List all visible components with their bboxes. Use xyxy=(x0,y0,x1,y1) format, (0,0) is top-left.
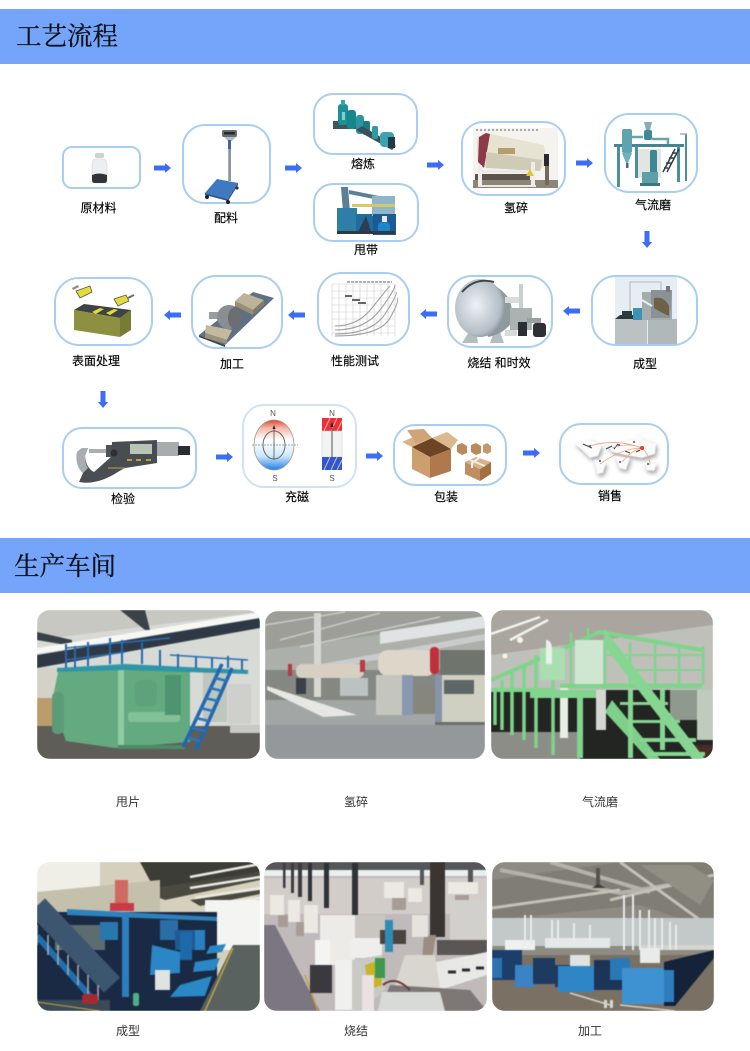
label: hydrogen decrepitation: 氢碎 xyxy=(504,201,528,215)
heading: process flow: 工艺流程 xyxy=(16,22,118,51)
label: magnetizing: 充磁 xyxy=(285,490,309,504)
arrow left xyxy=(420,309,437,319)
photo: hydrogen workshop xyxy=(265,611,485,759)
label: batching: 配料 xyxy=(214,211,238,225)
icon: machining fixture xyxy=(199,292,274,347)
label: jet mill: 气流磨 xyxy=(635,198,671,212)
panel: performance test xyxy=(317,272,410,346)
panel: strip casting xyxy=(313,183,419,242)
heading: production workshop xyxy=(0,538,750,593)
arrow left xyxy=(288,310,305,320)
arrow xyxy=(154,163,171,173)
panel: raw material xyxy=(62,146,141,189)
label: sintering: 烧结 xyxy=(344,1024,368,1038)
arrow down xyxy=(642,231,652,248)
icon: magnetic field diagrams: S xyxy=(272,474,278,483)
label: surface treatment: 表面处理 xyxy=(72,354,120,368)
label: inspection: 检验 xyxy=(111,492,135,506)
label: sintering and aging: 烧结 和时效 xyxy=(467,356,531,370)
label: raw material: 原材料 xyxy=(80,201,117,215)
label: performance test: 性能测试 xyxy=(331,354,379,368)
arrow xyxy=(285,163,302,173)
panel: pressing xyxy=(591,275,698,346)
heading: production workshop: 生产车间 xyxy=(14,552,116,581)
icon: platform scale xyxy=(205,130,239,204)
label: jet mill: 气流磨 xyxy=(582,795,618,809)
label: machining: 加工 xyxy=(220,357,244,371)
label: smelting: 熔炼 xyxy=(351,157,375,171)
arrow xyxy=(366,451,383,461)
panel: machining xyxy=(191,275,283,349)
icon: hydrogen drum photo xyxy=(473,128,558,188)
label: pressing: 成型 xyxy=(116,1024,140,1038)
panel: surface treatment xyxy=(54,277,153,346)
panel: inspection xyxy=(62,427,197,489)
label: strip flake: 甩片 xyxy=(116,795,140,809)
panel: sales xyxy=(559,423,669,485)
photo: jet mill workshop xyxy=(491,610,713,759)
icon: coated magnets xyxy=(72,285,134,337)
icon: magnetic field diagrams xyxy=(252,409,342,483)
icon: micrometer xyxy=(76,440,190,483)
icon: pressing machine xyxy=(615,277,677,344)
panel: sintering and aging xyxy=(447,275,553,348)
label: pressing: 成型 xyxy=(633,357,657,371)
panel: hydrogen decrepitation xyxy=(461,121,566,196)
label: packaging: 包装 xyxy=(434,490,458,504)
icon: jet mill machine xyxy=(614,122,687,187)
panel: jet mill xyxy=(604,113,698,193)
icon: cardboard boxes xyxy=(402,429,491,481)
label: strip casting: 甩带 xyxy=(354,243,378,257)
chart: demagnetization curves xyxy=(332,281,398,336)
photo: sintering workshop xyxy=(264,862,487,1011)
panel: smelting xyxy=(313,93,418,155)
label: sales: 销售 xyxy=(598,489,622,503)
arrow xyxy=(523,448,540,458)
arrow left xyxy=(164,310,181,320)
photo: pressing workshop xyxy=(37,862,260,1011)
arrow left xyxy=(563,306,580,316)
icon: smelting machine xyxy=(333,100,396,150)
icon: magnetic field diagrams: N xyxy=(329,409,335,418)
icon: magnetic field diagrams: N xyxy=(270,409,276,418)
label: machining: 加工 xyxy=(578,1024,602,1038)
arrow xyxy=(576,158,593,168)
photo: strip casting workshop xyxy=(37,610,260,759)
panel: batching xyxy=(182,124,271,204)
icon: strip casting machine xyxy=(337,187,396,235)
icon: magnetic field diagrams: S xyxy=(329,474,335,483)
label: hydrogen decrepitation: 氢碎 xyxy=(344,795,368,809)
arrow down xyxy=(98,391,108,408)
icon: world map xyxy=(574,438,660,479)
icon: sintering furnace xyxy=(455,279,546,343)
heading: process flow xyxy=(0,9,750,64)
photo: machining workshop xyxy=(492,862,714,1011)
arrow xyxy=(427,160,444,170)
panel: packaging xyxy=(393,424,507,486)
panel: magnetizing xyxy=(242,404,357,488)
icon: powder bottle xyxy=(92,153,108,184)
arrow xyxy=(216,452,233,462)
